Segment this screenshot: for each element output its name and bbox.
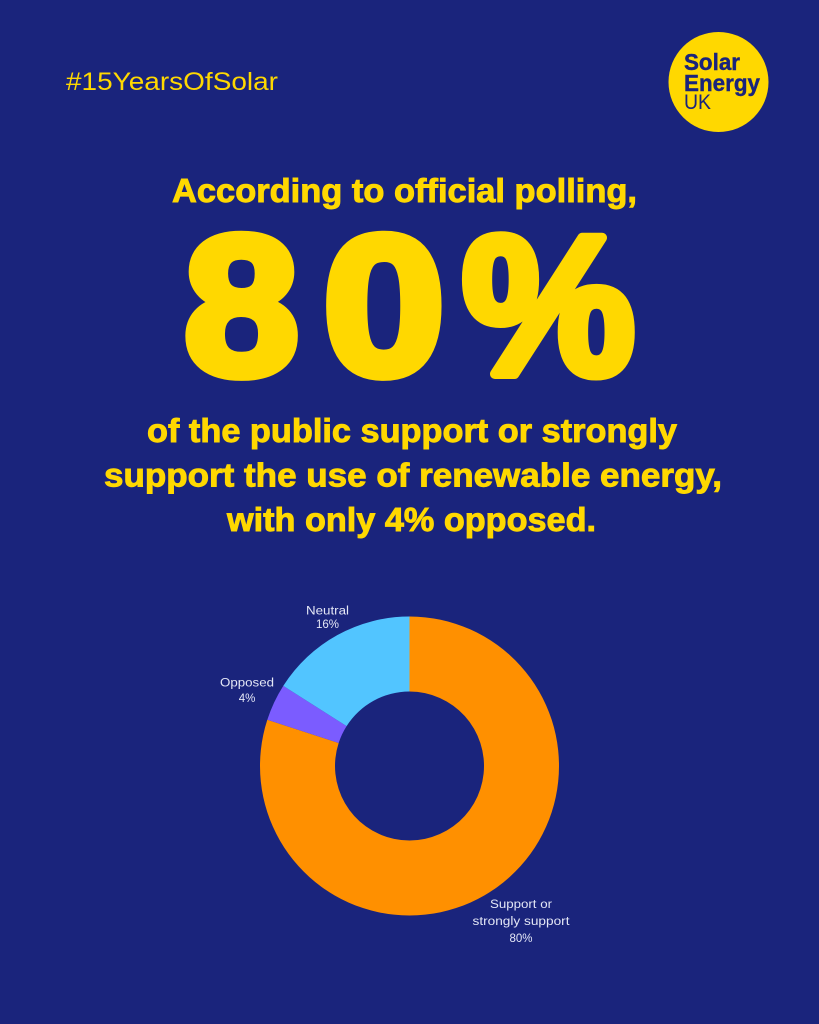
label: support: strongly support	[472, 916, 570, 928]
segment: opposed 4%	[267, 686, 347, 743]
headline figure: 80%	[184, 195, 635, 416]
label: opposed: Opposed	[220, 678, 274, 690]
donut chart	[260, 616, 559, 916]
label: opposed	[220, 678, 274, 705]
segment: support 80%	[260, 616, 559, 916]
hashtag: #15YearsOfSolar	[66, 68, 278, 96]
segment: neutral 16%	[283, 616, 410, 726]
headline figure: 80%: 0	[323, 195, 445, 416]
logo: Solar Energy UK	[668, 32, 768, 132]
headline figure: 80%: %	[462, 195, 635, 416]
label: opposed: 4%	[239, 693, 255, 705]
label: neutral: 16%	[316, 619, 339, 631]
label: neutral: Neutral	[306, 606, 349, 618]
logo: Solar Energy UK: Solar	[684, 49, 740, 75]
label: support	[472, 899, 570, 945]
label: support: 80%	[509, 933, 533, 945]
statement text: with only 4% opposed.	[226, 501, 596, 538]
statement text: of the public support or strongly	[147, 412, 678, 449]
label: neutral	[306, 606, 349, 631]
label: support: Support or	[490, 899, 552, 911]
heading: intro line: According to official polling,	[172, 172, 637, 209]
statement text: support the use of renewable energy,	[104, 456, 722, 494]
logo: Solar Energy UK: UK	[684, 91, 711, 114]
statement text	[104, 412, 722, 538]
headline figure: 80%: 8	[184, 195, 299, 416]
logo: Solar Energy UK: Energy	[684, 70, 760, 96]
